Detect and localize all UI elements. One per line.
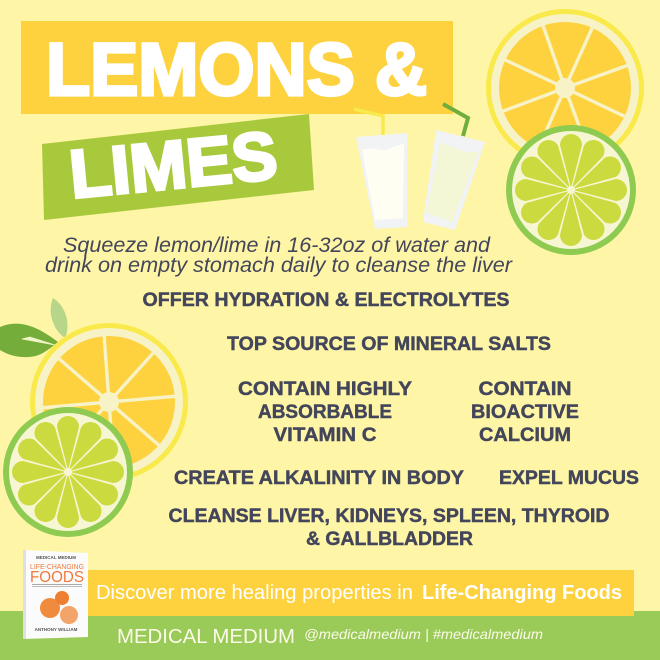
benefits list: BIOACTIVE	[471, 401, 579, 423]
book cover: ANTHONY WILLIAM	[35, 627, 78, 632]
subtitle: drink on empty stomach daily to cleanse the liver	[45, 253, 513, 277]
benefits list: EXPEL MUCUS	[499, 467, 639, 489]
benefits list: CONTAIN	[478, 378, 572, 400]
book cover: FOODS	[30, 569, 84, 586]
icon: top lime slice	[506, 125, 636, 255]
benefits list: VITAMIN C	[274, 424, 376, 446]
benefits list: ABSORBABLE	[258, 401, 392, 423]
benefits list: OFFER HYDRATION & ELECTROLYTES	[142, 289, 510, 311]
icon: lime water glass	[423, 104, 485, 230]
footer brand: MEDICAL MEDIUM	[117, 626, 295, 648]
icon: top lemon slice	[486, 9, 644, 167]
benefits list: & GALLBLADDER	[306, 528, 473, 550]
benefits list: CREATE ALKALINITY IN BODY	[174, 467, 464, 489]
icon: lower lime slice	[3, 407, 133, 537]
icon: lower lemon slice	[30, 323, 188, 481]
title: lemons: LEMONS &	[46, 28, 427, 111]
footer social handles: @medicalmedium | #medicalmedium	[304, 626, 543, 642]
call to action banner: Life-Changing Foods	[422, 582, 622, 604]
icon: lemon water glass	[354, 109, 407, 229]
benefits list: CLEANSE LIVER, KIDNEYS, SPLEEN, THYROID	[168, 505, 610, 527]
book cover: MEDICAL MEDIUM	[36, 555, 76, 560]
benefits list: TOP SOURCE OF MINERAL SALTS	[227, 333, 551, 355]
subtitle: Squeeze lemon/lime in 16-32oz of water and	[63, 233, 491, 257]
title: limes: LIMES	[66, 117, 280, 213]
benefits list: CALCIUM	[479, 424, 571, 446]
book cover: LIFE-CHANGING	[30, 564, 84, 571]
footer band	[0, 611, 660, 660]
benefits list: CONTAIN HIGHLY	[238, 378, 412, 400]
subtitle	[45, 233, 513, 277]
benefits list	[142, 289, 639, 550]
book cover	[23, 550, 88, 639]
call to action banner: Discover more healing properties in	[96, 582, 413, 604]
call to action banner	[88, 570, 634, 616]
icon: leaves	[0, 298, 68, 357]
